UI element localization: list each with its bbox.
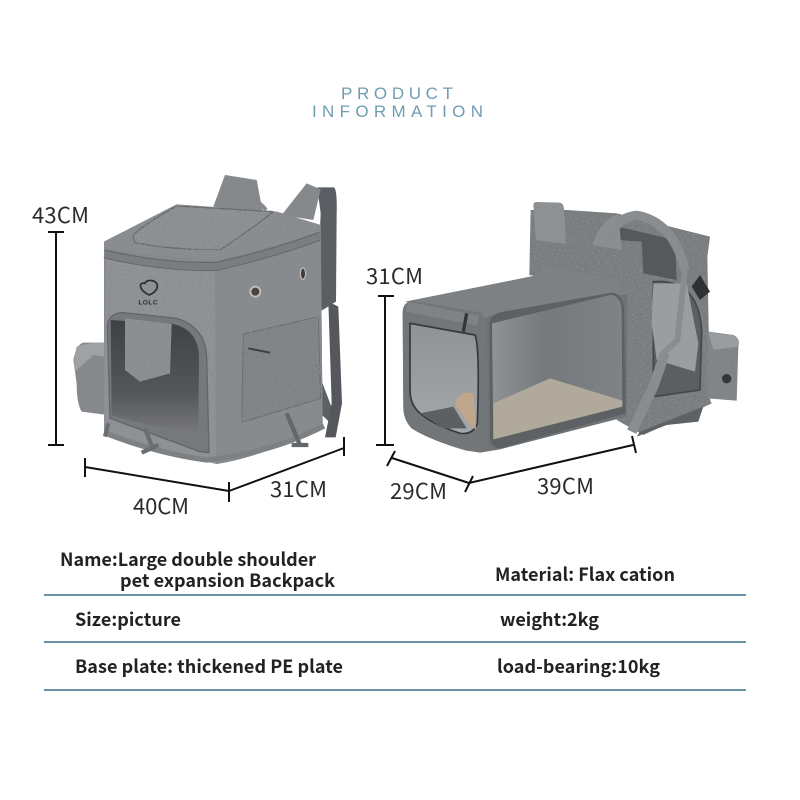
top carry handle <box>238 199 266 210</box>
right shoulder strap <box>282 183 342 437</box>
spec: load-bearing: load-bearing:10kg <box>497 653 660 679</box>
depth dimension: 31CM <box>229 437 344 504</box>
depth dimension: 29CM: 29CM <box>390 474 447 506</box>
mesh window <box>107 313 209 453</box>
lid flap <box>133 206 273 250</box>
length dimension: 39CM: 39CM <box>537 469 594 501</box>
product photo: expanded backpack <box>403 202 739 453</box>
width dimension: 40CM: 40CM <box>133 489 189 521</box>
mesh tent silhouette <box>403 266 627 453</box>
strap buckle <box>692 275 710 300</box>
mesh tent end panel <box>403 301 487 452</box>
height dimension: 43CM: 43CM <box>32 198 89 230</box>
length dimension: 39CM <box>469 436 636 501</box>
spec table <box>44 546 746 690</box>
bag silhouette <box>104 204 323 464</box>
bag body <box>104 233 323 464</box>
depth dimension: 29CM <box>387 451 473 506</box>
bottom trim and buckles <box>104 413 324 460</box>
circular side mesh door <box>652 281 702 397</box>
product photo: closed backpack <box>73 175 342 464</box>
top panel <box>104 204 321 261</box>
zip band <box>105 232 320 271</box>
title: product information: INFORMATION <box>312 102 483 121</box>
width dimension: 40CM <box>85 458 229 521</box>
left shoulder strap <box>213 175 263 215</box>
back body <box>529 210 712 435</box>
mesh tent side panel <box>489 293 626 448</box>
height dimension: 31CM <box>366 259 423 445</box>
grab handle <box>533 202 566 244</box>
mesh tent top <box>405 266 627 318</box>
side bottle pocket <box>73 343 107 415</box>
spec: size: Size:picture <box>75 606 181 632</box>
spec: name: Name:Large double shoulder <box>60 546 316 572</box>
title: product information: PRODUCT <box>341 84 453 103</box>
spec: name <box>60 546 335 593</box>
front zip pocket <box>242 317 321 422</box>
spec: material: Material: Flax cation <box>495 561 675 587</box>
bottom base and buckle <box>637 407 703 437</box>
depth dimension: 31CM: 31CM <box>270 472 327 504</box>
brand logo <box>138 280 158 307</box>
title: product information <box>312 84 483 121</box>
height dimension: 43CM <box>32 198 89 445</box>
second handle base <box>593 214 622 250</box>
height dimension: 31CM: 31CM <box>366 259 423 291</box>
air hole eyelets <box>250 268 306 297</box>
shoulder strap <box>611 215 685 432</box>
side pocket <box>707 332 739 401</box>
brand logo: LOLC <box>138 300 158 307</box>
spec: weight: weight:2kg <box>500 606 599 632</box>
spec: base plate: Base plate: thickened PE plate <box>75 653 343 679</box>
spec: name: pet expansion Backpack <box>120 567 335 593</box>
inner dark opening <box>618 227 677 280</box>
